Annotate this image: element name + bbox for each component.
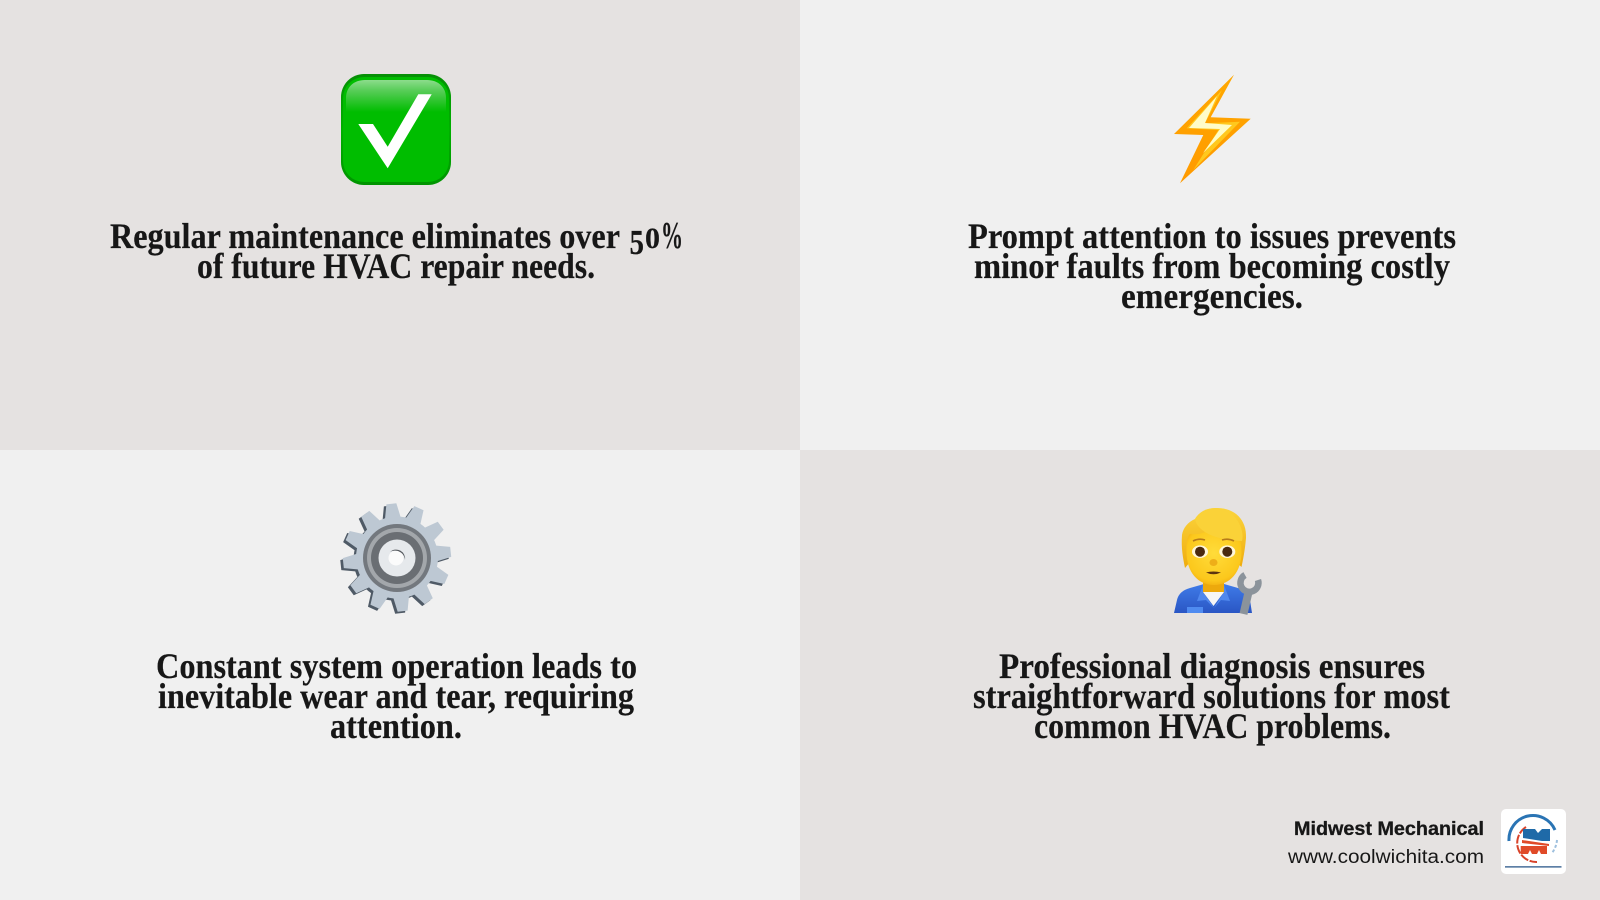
heading: regular maintenance: 5 (630, 223, 644, 262)
panel: constant operation (0, 450, 800, 900)
panel: prompt attention (800, 0, 1600, 450)
heading: prompt attention: minor faults from becoming costly (974, 246, 1450, 286)
panel: professional diagnosis (800, 450, 1600, 900)
branding: company name and website: www.coolwichita.com (1287, 847, 1484, 868)
heading: professional diagnosis: common HVAC problems. (1034, 706, 1391, 746)
icon: lightning bolt (1174, 75, 1251, 183)
icon: green check mark (341, 74, 451, 185)
heading: regular maintenance: of future HVAC repair needs. (197, 246, 595, 286)
heading: professional diagnosis: straightforward solutions for most (973, 676, 1450, 716)
logo: Midwest Mechanical (1501, 809, 1566, 874)
panel: regular maintenance (0, 0, 800, 450)
icon: mechanic (1174, 508, 1258, 614)
heading: regular maintenance: % (661, 215, 683, 257)
icon: wrench (1240, 575, 1258, 614)
heading: constant operation: attention. (330, 706, 462, 746)
heading: regular maintenance (110, 215, 683, 286)
heading: prompt attention: emergencies. (1121, 276, 1303, 316)
heading: regular maintenance: Regular maintenance eliminates over (110, 216, 620, 256)
heading: prompt attention: Prompt attention to issues prevents (968, 216, 1456, 256)
branding: company name and website: Midwest Mechanical (1294, 819, 1484, 840)
heading: constant operation: inevitable wear and tear, requiring (158, 676, 634, 716)
icon: gear (340, 503, 452, 614)
heading: regular maintenance: 0 (645, 222, 660, 255)
heading: constant operation: Constant system operation leads to (156, 646, 637, 686)
heading: professional diagnosis: Professional diagnosis ensures (999, 646, 1425, 686)
branding: company name and website (1287, 819, 1484, 868)
